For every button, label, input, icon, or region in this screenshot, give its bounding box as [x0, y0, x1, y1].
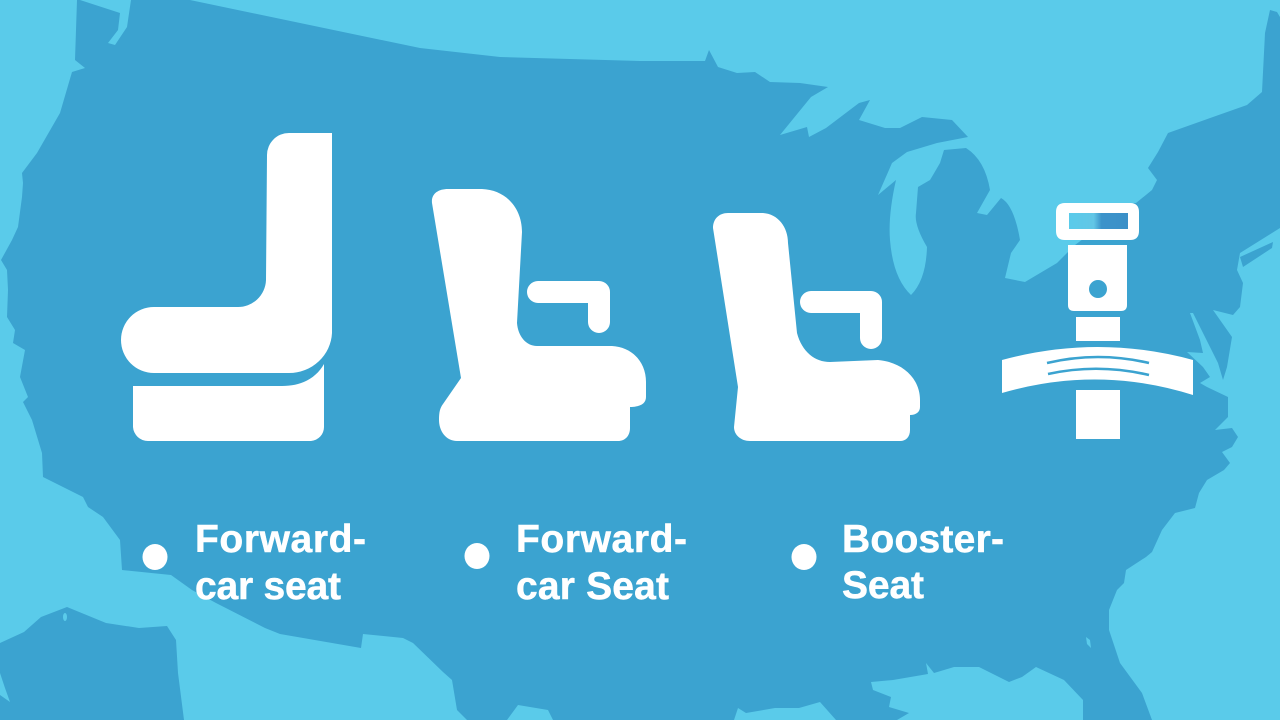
label: booster seat: [792, 518, 1004, 607]
icon: rear-facing infant seat: [121, 133, 332, 441]
icon: booster seat: [713, 213, 920, 441]
label: second forward car seat: Forward-: [516, 518, 687, 561]
icon: forward-facing car seat: [432, 189, 646, 441]
label: booster seat: Booster-: [842, 518, 1004, 561]
label: first forward car seat: Forward-: [195, 518, 366, 561]
label: first forward car seat: car seat: [195, 565, 341, 608]
label: second forward car seat: car Seat: [516, 565, 669, 608]
label: second forward car seat: [464, 518, 687, 608]
label: booster seat: Seat: [842, 564, 924, 607]
map: Long Island: [1240, 242, 1273, 267]
map: Baja region lower left: [0, 607, 184, 720]
label: first forward car seat: [142, 518, 366, 608]
map: small light coastal details: [0, 613, 1091, 702]
icon: seat belt and buckle: [1002, 203, 1193, 439]
